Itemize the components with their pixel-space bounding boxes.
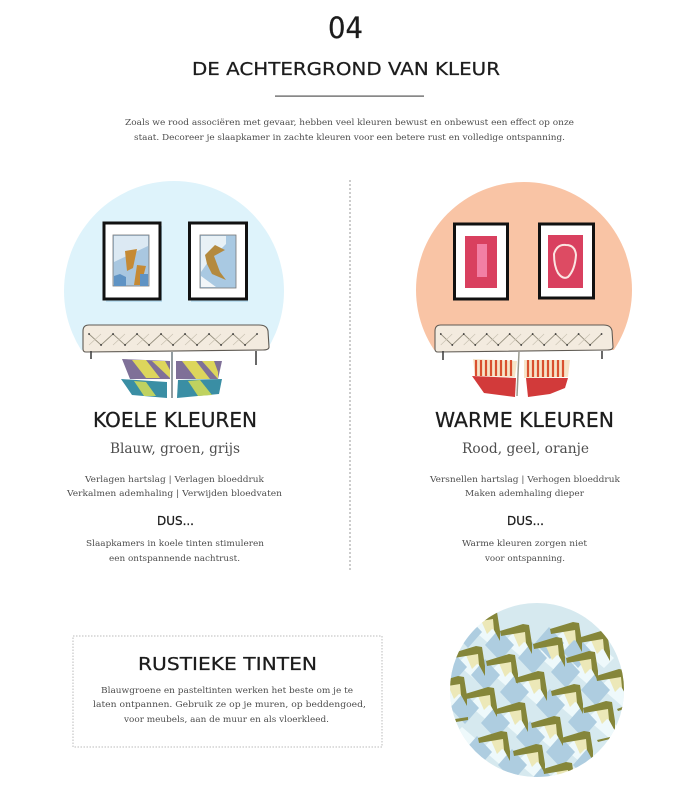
heading: warme kleuren: WARME KLEUREN [435,408,614,432]
panel: rustieke tinten [73,636,382,747]
pattern swatch circle [450,603,624,777]
intro text [125,118,574,143]
peach wall circle [416,182,632,350]
intro text: Zoals we rood associëren met gevaar, hebben veel kleuren bewust en onbewust een effect op onze [125,118,574,128]
effects list [429,475,621,499]
effects list: Verlagen hartslag | Verlagen bloeddruk [84,475,265,485]
headboard [435,325,613,352]
conclusion: Warme kleuren zorgen niet [462,539,588,549]
heading: DE ACHTERGROND VAN KLEUR [192,59,500,80]
headboard legs [443,351,602,360]
box text: voor meubels, aan de muur en als vloerkleed. [123,715,329,725]
box heading: RUSTIEKE TINTEN [138,654,317,675]
pillows [472,352,570,397]
headboard legs [91,351,256,365]
box text: laten ontpannen. Gebruik ze op je muren, op beddengoed, [93,700,366,710]
subtitle: Rood, geel, oranje [462,441,589,457]
intro text: staat. Decoreer je slaapkamer in zachte kleuren voor een betere rust en volledige ontspanning. [134,133,565,143]
dus label: DUS... [157,514,194,528]
pillows [121,352,222,398]
illustration: warm bedroom [416,182,632,398]
conclusion [462,539,588,564]
title number: 04 [328,11,363,45]
conclusion: een ontspannende nachtrust. [109,554,240,564]
conclusion: Slaapkamers in koele tinten stimuleren [86,539,265,549]
effects list: Maken ademhaling dieper [465,489,585,499]
box text: Blauwgroene en pasteltinten werken het beste om je te [101,686,353,696]
headboard [83,325,269,352]
framed art left [104,223,162,302]
conclusion: voor ontspanning. [484,554,565,564]
panel: koele kleuren [64,181,284,564]
framed art left [454,224,508,299]
framed art right [190,223,248,302]
conclusion [86,539,265,564]
dashed centre divider [349,180,351,572]
heading underline [275,96,424,97]
pale blue wall circle [64,181,284,350]
panel: warme kleuren [416,182,632,564]
framed art right [540,224,594,298]
box border [73,636,382,747]
illustration: cool bedroom [64,181,284,401]
effects list: Verkalmen ademhaling | Verwijden bloedvaten [66,489,283,499]
heading: koele kleuren: KOELE KLEUREN [93,408,257,432]
box text [93,686,366,725]
effects list: Versnellen hartslag | Verhogen bloeddruk [429,475,621,485]
dus label: DUS... [507,514,544,528]
effects list [66,475,283,499]
subtitle: Blauw, groen, grijs [110,441,240,457]
